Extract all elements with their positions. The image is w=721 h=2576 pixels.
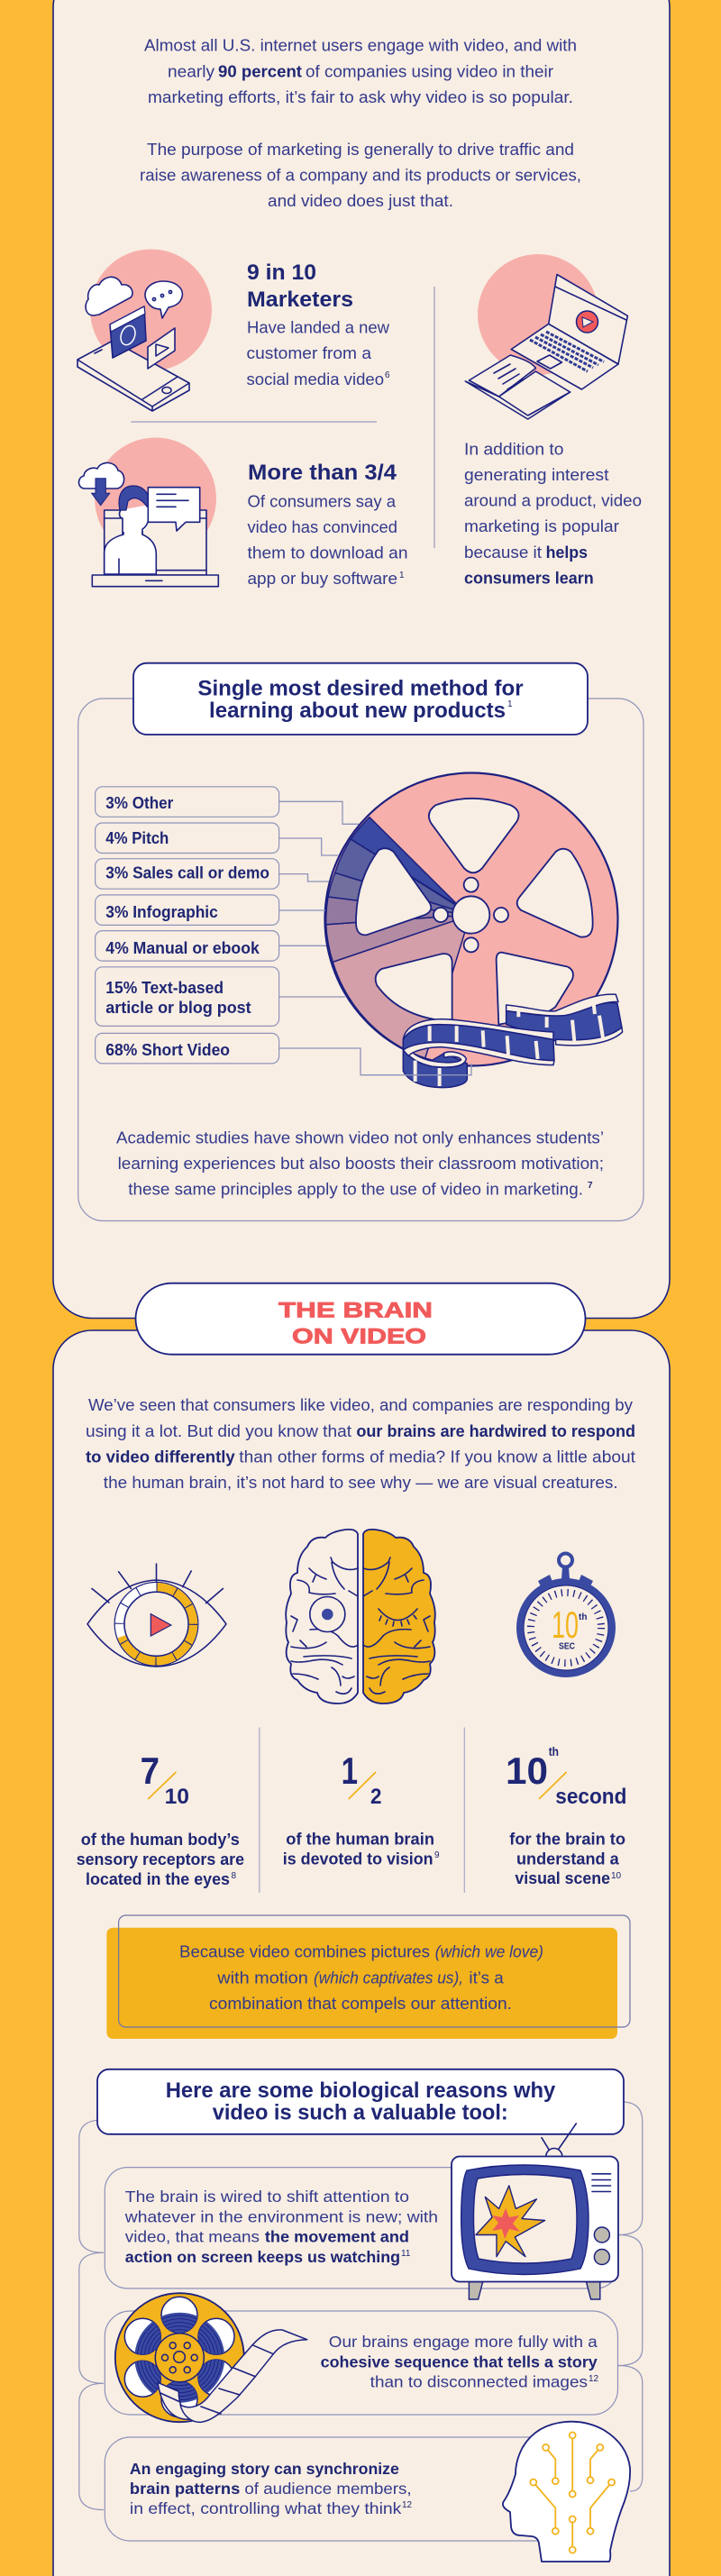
stat: more than three quarters: More than 3/4 <box>248 461 397 485</box>
legend item: sales call: 3% Sales call or demo <box>105 863 269 882</box>
icon: stopwatch: 10 <box>552 1603 579 1646</box>
panel: the brain on video <box>53 1330 670 2576</box>
stat: 10th second: 10 <box>611 1871 622 1881</box>
intro text: 90 percent <box>218 62 302 80</box>
stat: 10th second: 10 <box>506 1749 548 1792</box>
stat: 7/10: 10 <box>165 1785 189 1809</box>
text: brains are hardwired: the human brain, it’s not hard to see why — we are visual creatures. <box>104 1474 618 1492</box>
stat: 9 in 10 marketers: 9 in 10 <box>247 260 316 285</box>
stat: more than three quarters: app or buy software <box>247 570 397 588</box>
text: brains are hardwired: our brains are hardwired to respond <box>356 1422 635 1440</box>
reel windows <box>356 799 593 1025</box>
stat: more than three quarters: them to download an <box>247 544 407 562</box>
legend: methods <box>96 787 279 1064</box>
stat: 10th second: second <box>555 1785 626 1809</box>
stat: 9 in 10 marketers: Have landed a new <box>247 319 390 337</box>
legend item: infographic: 3% Infographic <box>105 903 218 921</box>
stat: 9 in 10 marketers: Marketers <box>247 288 353 312</box>
stat: 7/10 <box>77 1749 244 1888</box>
heading: biological reasons: video is such a valuable tool: <box>213 2100 508 2124</box>
icon: laptop and book <box>465 254 627 419</box>
callout: video combines pictures with motion <box>106 1915 630 2039</box>
callout: video combines pictures with motion: with motion <box>216 1969 308 1987</box>
stat: more than three quarters: 1 <box>399 571 405 580</box>
text: brains are hardwired: than other forms of media? If you know a little about <box>239 1448 635 1466</box>
stat: 9 in 10 marketers: social media video <box>247 370 384 388</box>
heading: biological reasons: Here are some biological reasons why <box>166 2078 556 2103</box>
stat: helps consumers learn: In addition to <box>464 440 564 458</box>
text: academic studies: 7 <box>588 1181 593 1191</box>
icon: stopwatch: SEC <box>559 1642 575 1651</box>
stat: 10th second <box>506 1744 626 1887</box>
card: attention: action on screen keeps us watching <box>125 2248 400 2266</box>
text: academic studies: Academic studies have shown video not only enhances students’ <box>116 1128 604 1146</box>
stat: 10th second: th <box>549 1744 559 1758</box>
stat: more than three quarters: Of consumers say a <box>247 492 397 510</box>
legend item: pitch: 4% Pitch <box>105 829 169 847</box>
stat: 7/10: sensory receptors are <box>77 1850 244 1868</box>
card: synchronize brains: of audience members, <box>244 2480 412 2498</box>
stat: 1/2: 1 <box>342 1749 358 1792</box>
legend item: other <box>96 787 279 817</box>
card: synchronize brains: brain patterns <box>130 2480 241 2498</box>
card: attention: video, that means <box>125 2228 260 2246</box>
text: brains are hardwired: using it a lot. But did you know that <box>86 1422 351 1440</box>
icon: person downloading <box>78 438 218 587</box>
stat: 1/2: 2 <box>370 1785 382 1809</box>
card: cohesive story: cohesive sequence that tells a story <box>321 2352 598 2370</box>
callout: video combines pictures with motion: (which captivates us), <box>314 1969 463 1987</box>
stat: helps consumers learn: marketing is popular <box>464 517 619 535</box>
intro text <box>140 37 581 210</box>
stat: helps consumers learn <box>464 440 642 587</box>
stat: 9 in 10 marketers: 6 <box>385 370 390 380</box>
stat: helps consumers learn: because it <box>464 544 542 562</box>
heading: single most desired method: 1 <box>507 699 513 709</box>
intro text: and video does just that. <box>268 192 453 210</box>
callout: video combines pictures with motion: combination that compels our attention. <box>209 1995 512 2013</box>
icon: phone with social media <box>78 249 212 411</box>
text: academic studies <box>116 1128 604 1198</box>
legend item: infographic <box>96 895 279 925</box>
chart: film reel pie <box>324 773 623 1088</box>
stat: 9 in 10 marketers: customer from a <box>247 344 372 362</box>
icon: brain <box>286 1530 435 1704</box>
intro text: The purpose of marketing is generally to drive traffic and <box>147 141 574 159</box>
legend connectors <box>279 801 471 1075</box>
callout: video combines pictures with motion: (which we love) <box>435 1943 543 1961</box>
card: synchronize brains: 12 <box>402 2500 413 2510</box>
panel: desired method outline <box>78 699 643 1220</box>
icon: television <box>452 2124 618 2299</box>
title pill: the brain on video: ON VIDEO <box>292 1325 426 1349</box>
legend item: pitch <box>96 823 279 853</box>
stat: 1/2: is devoted to vision <box>283 1850 434 1868</box>
text: academic studies: these same principles apply to the use of video in marketing. <box>128 1180 583 1198</box>
legend item: manual <box>96 931 279 961</box>
stat: 1/2: 9 <box>434 1850 440 1860</box>
heading: biological reasons <box>97 2069 624 2134</box>
stat: 1/2: of the human brain <box>286 1830 434 1848</box>
card: synchronize brains: An engaging story can synchronize <box>130 2460 399 2478</box>
legend item: short video: 68% Short Video <box>105 1041 230 1059</box>
intro text: marketing efforts, it’s fair to ask why video is so popular. <box>148 88 573 106</box>
stat: 10th second: for the brain to <box>509 1830 625 1848</box>
title pill: the brain on video <box>135 1283 586 1355</box>
icon: stopwatch: th <box>579 1612 587 1622</box>
card: synchronize brains: in effect, controlling what they think <box>130 2499 402 2517</box>
stat: helps consumers learn: helps <box>546 544 588 562</box>
icon: head with circuit <box>503 2422 630 2562</box>
text: brains are hardwired: to video differently <box>86 1448 235 1466</box>
callout: video combines pictures with motion: it’s a <box>469 1969 505 1987</box>
icon: film reel <box>115 2293 307 2422</box>
card: attention: whatever in the environment is new; with <box>124 2208 438 2226</box>
legend item: text-based: article or blog post <box>105 999 251 1017</box>
icon: eye with play button <box>87 1564 226 1667</box>
icon: stopwatch <box>520 1554 612 1674</box>
text: brains are hardwired <box>86 1396 635 1492</box>
stat: 7/10: 7 <box>141 1749 160 1792</box>
heading: single most desired method: learning about new products <box>209 699 506 723</box>
text: academic studies: learning experiences but also boosts their classroom motivation; <box>118 1155 604 1173</box>
legend item: other: 3% Other <box>105 794 173 812</box>
intro text: raise awareness of a company and its products or services, <box>140 166 581 184</box>
card: cohesive story: than to disconnected images <box>370 2373 588 2391</box>
stat: more than three quarters <box>247 461 407 588</box>
legend item: sales call <box>96 859 279 889</box>
legend item: manual: 4% Manual or ebook <box>105 939 260 957</box>
legend item: text-based <box>96 967 279 1026</box>
heading: single most desired method: Single most desired method for <box>197 676 524 700</box>
card: cohesive story: 12 <box>589 2374 599 2384</box>
stat: 10th second: visual scene <box>515 1869 610 1887</box>
stat: 7/10: of the human body’s <box>81 1831 240 1849</box>
brain left hemisphere <box>286 1530 358 1704</box>
intro text: nearly <box>168 62 214 80</box>
card: synchronize brains <box>105 2437 618 2541</box>
card: attention: The brain is wired to shift attention to <box>125 2188 409 2206</box>
card: cohesive story <box>105 2311 618 2415</box>
title pill: the brain on video: THE BRAIN <box>278 1299 433 1323</box>
stat: 1/2 <box>283 1749 440 1868</box>
stat: helps consumers learn: around a product, video <box>464 492 642 510</box>
stat: more than three quarters: video has convinced <box>247 518 397 536</box>
text: brains are hardwired: We’ve seen that consumers like video, and companies are responding by <box>88 1396 633 1414</box>
stat: helps consumers learn: consumers learn <box>464 569 594 587</box>
card: cohesive story: Our brains engage more fully with a <box>329 2333 598 2351</box>
intro text: of companies using video in their <box>306 62 553 80</box>
stat: helps consumers learn: generating interest <box>464 466 609 484</box>
stat: 9 in 10 marketers <box>247 260 390 388</box>
film strip <box>403 994 623 1088</box>
stat: 10th second: understand a <box>516 1850 620 1868</box>
brain right hemisphere <box>363 1530 435 1704</box>
intro text: Almost all U.S. internet users engage with video, and with <box>144 37 577 55</box>
callout: video combines pictures with motion: Because video combines pictures <box>179 1943 430 1961</box>
legend item: short video <box>96 1033 279 1064</box>
stat: 7/10: 8 <box>231 1871 236 1881</box>
card: attention: the movement and <box>265 2228 409 2246</box>
heading: single most desired method <box>133 663 588 735</box>
card: attention: 11 <box>401 2249 411 2259</box>
stat: 7/10: located in the eyes <box>86 1870 230 1888</box>
legend item: text-based: 15% Text-based <box>105 979 224 997</box>
panel: why video marketing <box>53 0 670 1318</box>
card: attention <box>105 2168 618 2288</box>
